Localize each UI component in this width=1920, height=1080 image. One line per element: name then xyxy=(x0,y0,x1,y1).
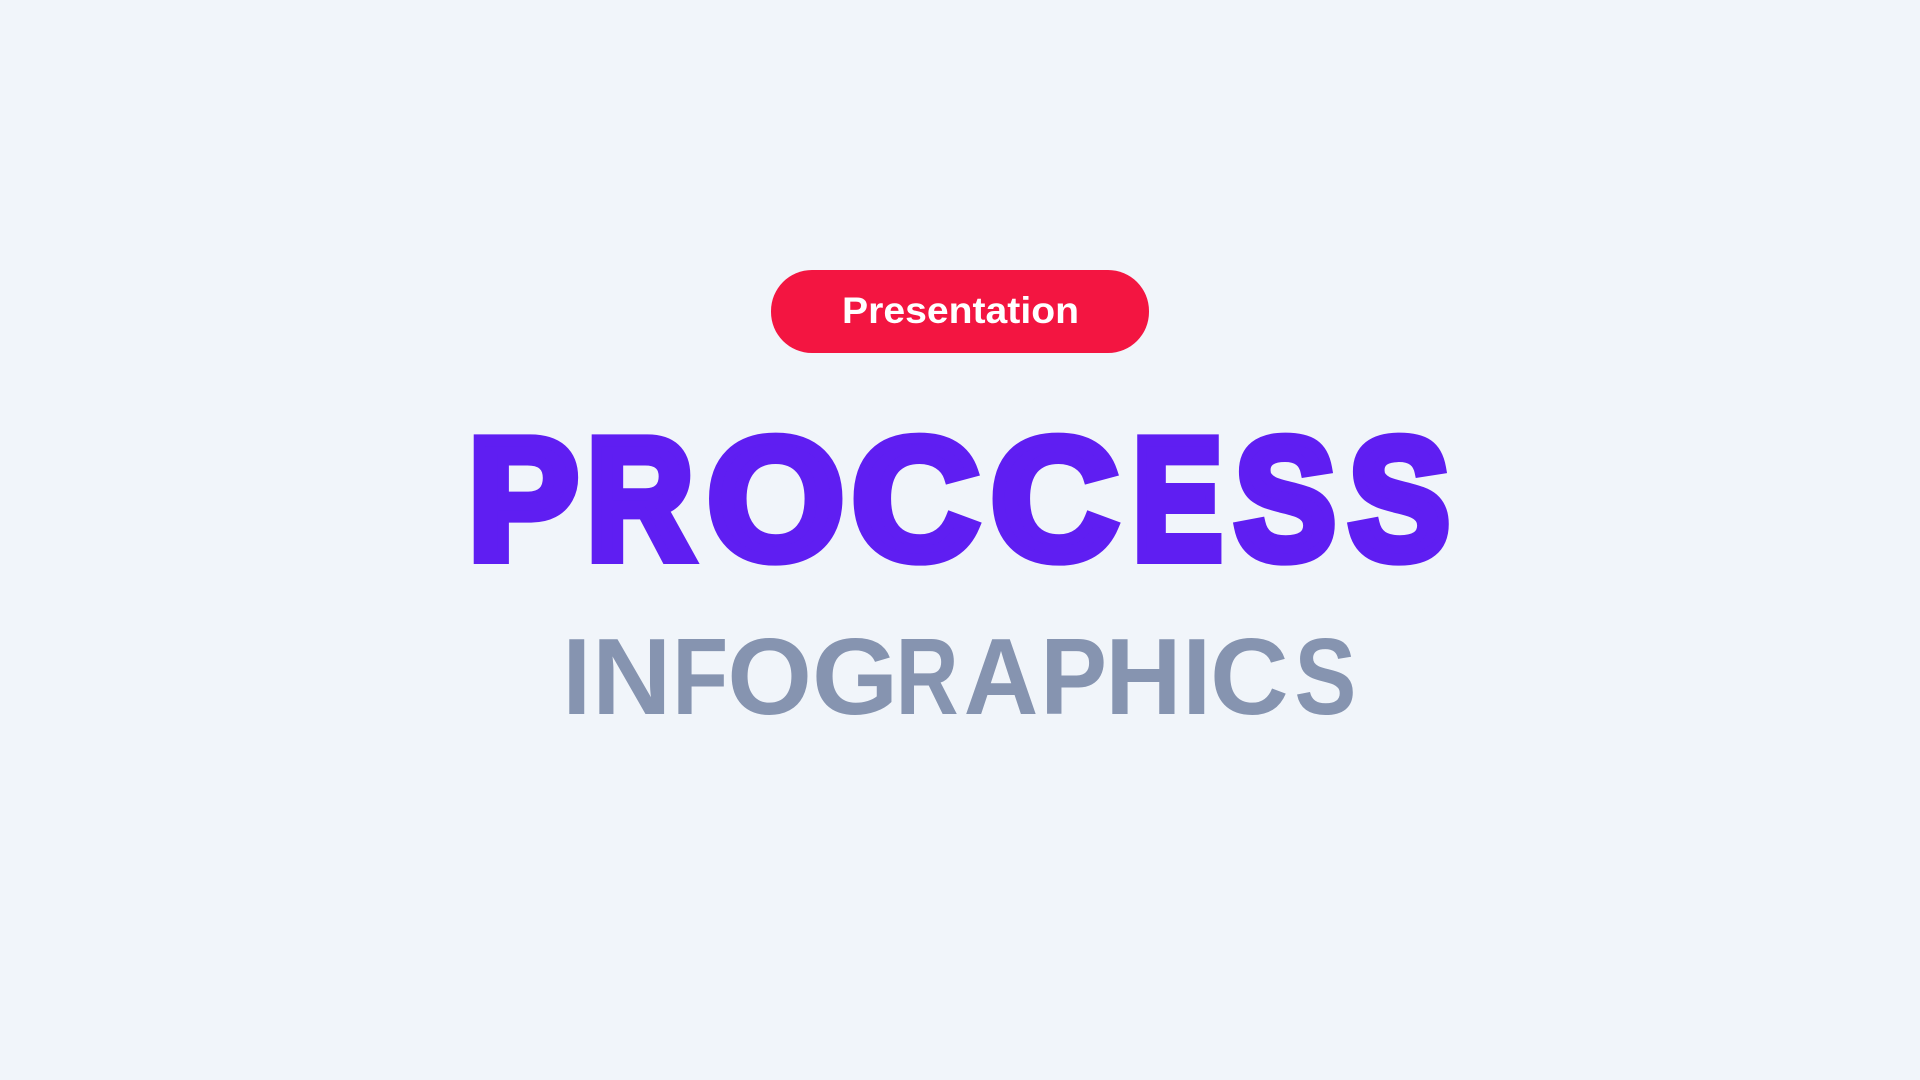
title: PROCCESS: S xyxy=(1349,404,1449,595)
subtitle: INFOGRAPHICS xyxy=(562,616,1356,738)
subtitle: INFOGRAPHICS: N xyxy=(592,616,672,738)
title: PROCCESS: R xyxy=(587,404,693,594)
title: PROCCESS: O xyxy=(708,404,844,595)
subtitle: INFOGRAPHICS: F xyxy=(672,617,728,738)
subtitle: INFOGRAPHICS: P xyxy=(1040,616,1107,738)
subtitle: INFOGRAPHICS: O xyxy=(727,616,812,738)
badge: Presentation pill xyxy=(771,270,1149,353)
title: PROCCESS: S xyxy=(1235,404,1335,595)
title: PROCCESS: C xyxy=(852,404,978,595)
subtitle: INFOGRAPHICS: C xyxy=(1210,616,1289,738)
badge: Presentation pill: Presentation xyxy=(842,290,1079,331)
subtitle: INFOGRAPHICS: I xyxy=(562,616,591,738)
title: PROCCESS: E xyxy=(1133,404,1222,595)
title: PROCCESS: C xyxy=(992,404,1117,595)
subtitle: INFOGRAPHICS: H xyxy=(1105,616,1182,737)
subtitle: INFOGRAPHICS: G xyxy=(812,616,898,738)
subtitle: INFOGRAPHICS: A xyxy=(964,616,1038,738)
subtitle: INFOGRAPHICS: S xyxy=(1294,616,1356,738)
subtitle: INFOGRAPHICS: R xyxy=(896,616,959,737)
title: PROCCESS xyxy=(468,403,1449,595)
title: PROCCESS: P xyxy=(468,403,578,595)
subtitle: INFOGRAPHICS: I xyxy=(1182,616,1211,738)
